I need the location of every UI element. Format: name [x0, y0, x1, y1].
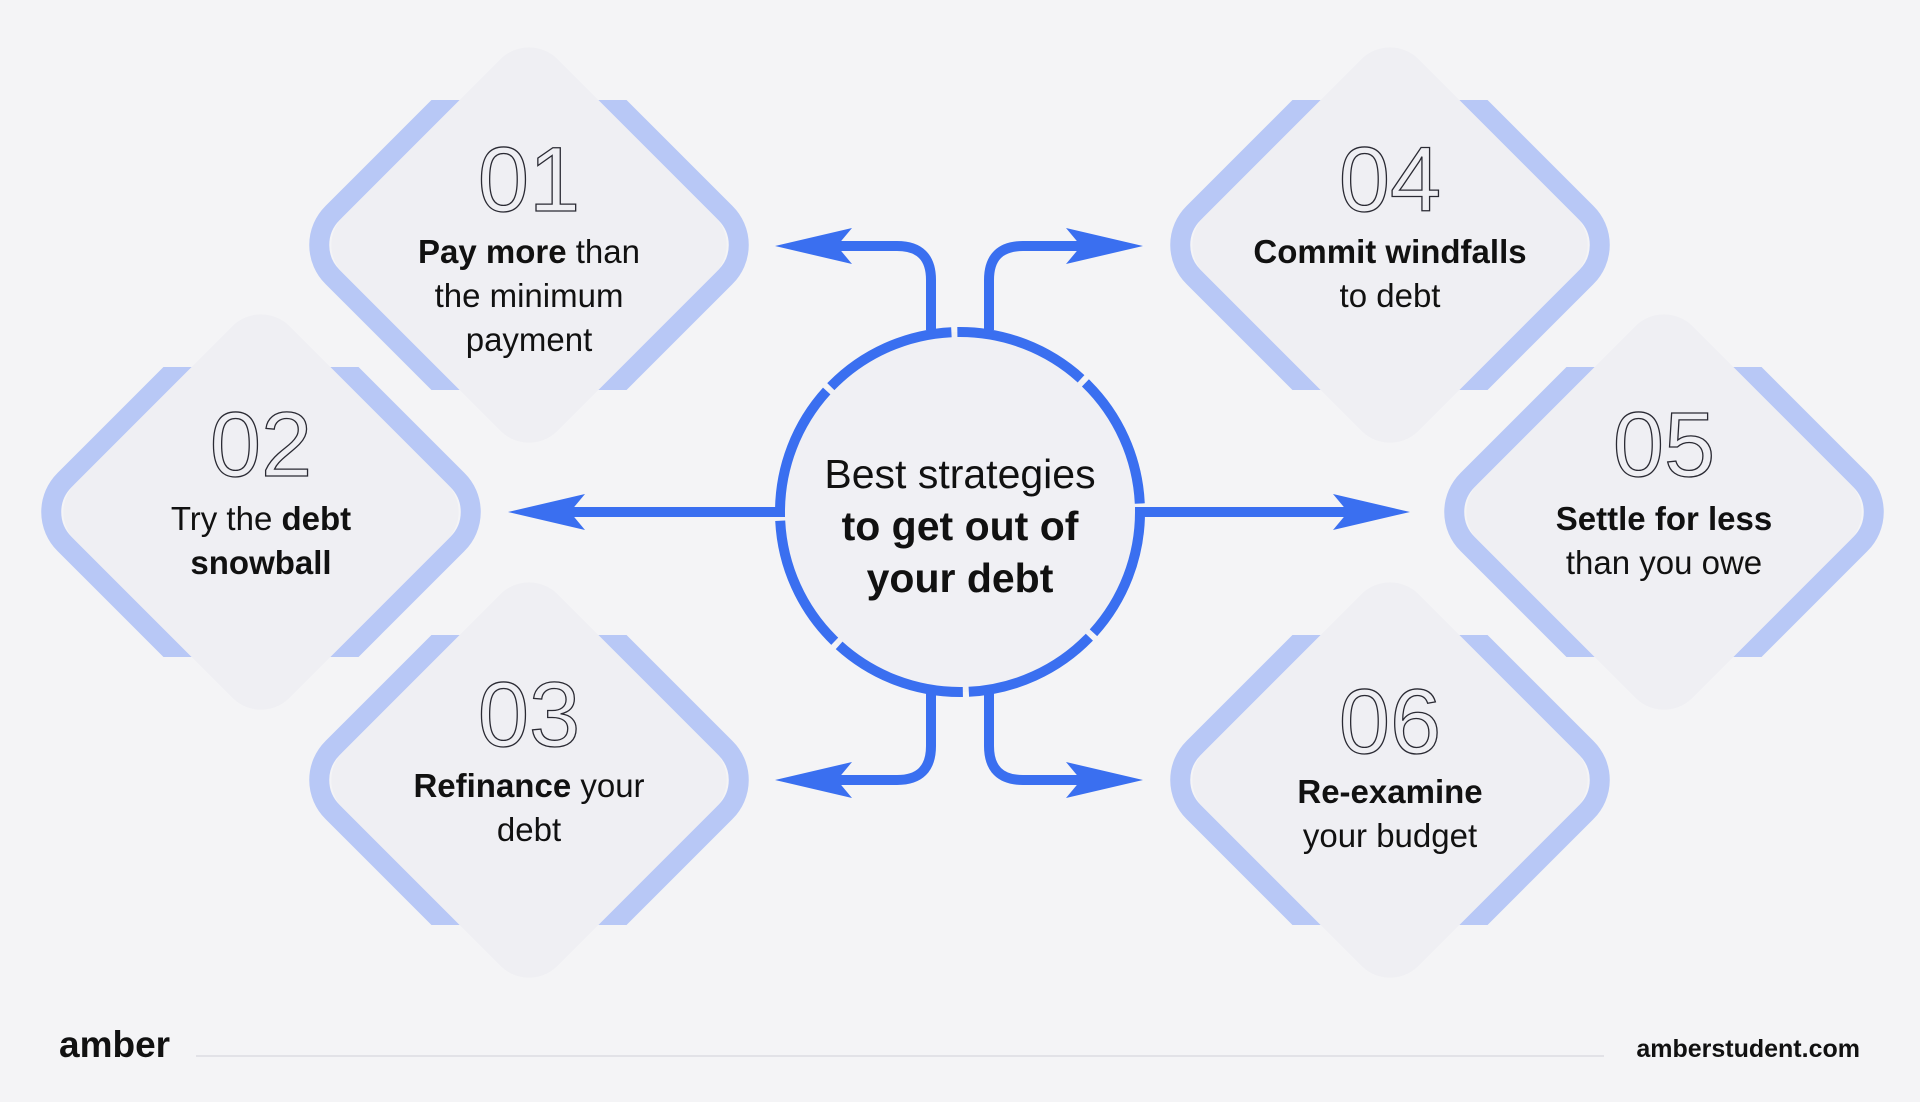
diamond 03: debt [497, 811, 561, 848]
diamond 01: 01 [478, 129, 580, 231]
diamond 01 [309, 100, 749, 390]
diamond 06: Re-examine [1297, 773, 1483, 810]
diamond 04: Commit windfalls [1253, 233, 1527, 270]
diamond 04 [1170, 100, 1610, 390]
diamond 01: Pay more than [418, 233, 640, 270]
diamond 06 [1170, 635, 1610, 925]
center circle: Best strategies [824, 451, 1096, 497]
arrows [508, 228, 1410, 798]
diamond 03 [309, 635, 749, 925]
center circle: your debt [867, 555, 1054, 601]
footer url: amberstudent.com [1636, 1035, 1860, 1063]
diamond 05: 05 [1613, 394, 1715, 496]
diamond 05: than you owe [1566, 544, 1762, 581]
diamond 02: snowball [190, 544, 332, 581]
diamond 03: Refinance your [413, 767, 645, 804]
diamond 05 [1444, 367, 1884, 657]
diamond 04: 04 [1339, 129, 1441, 231]
diamond 02 [41, 367, 481, 657]
center circle: to get out of [842, 503, 1079, 549]
diamond 04: to debt [1340, 277, 1440, 314]
diamond 03: 03 [478, 664, 580, 766]
diamond 06: your budget [1303, 817, 1477, 854]
diamond 02: Try the debt [171, 500, 351, 537]
diamond 01: payment [466, 321, 592, 358]
footer logo: amber [59, 1024, 170, 1065]
diamond 06: 06 [1339, 671, 1441, 773]
diamond 01: the minimum [435, 277, 623, 314]
diamond 02: 02 [210, 394, 312, 496]
center circle [780, 332, 1140, 692]
diamond 05: Settle for less [1556, 500, 1772, 537]
